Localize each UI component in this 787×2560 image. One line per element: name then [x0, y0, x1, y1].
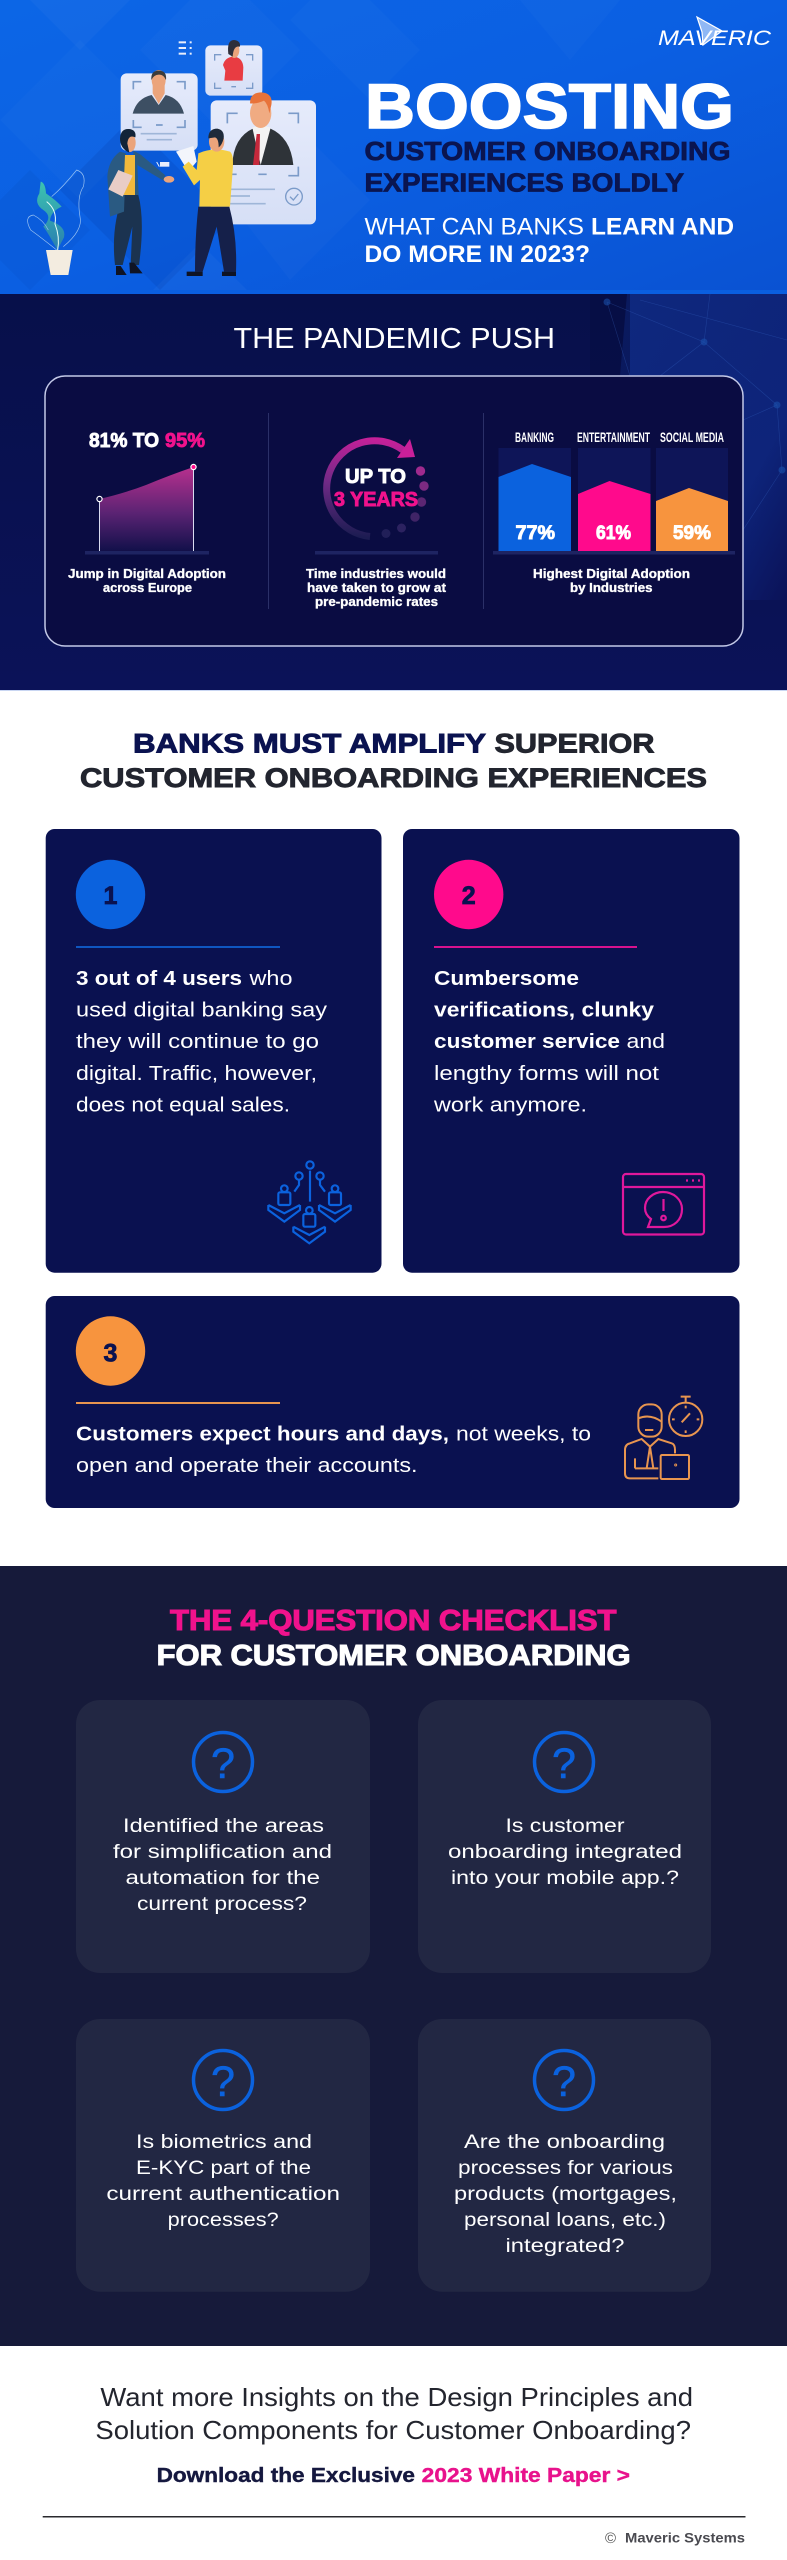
- card 3: customer expectations: [46, 1296, 739, 1508]
- prompt text: Want more Insights on the Design Principles and: [100, 2382, 693, 2412]
- icon: question mark: ?: [552, 2058, 576, 2106]
- number badge 2: [434, 860, 503, 929]
- question text: [106, 2132, 340, 2231]
- icon: question mark: ?: [211, 1740, 235, 1788]
- caption: have taken to grow at: [307, 580, 447, 595]
- figure: man with clipboard: [176, 129, 236, 276]
- question text: automation for the: [126, 1868, 320, 1889]
- icon: plant in pot: [28, 170, 84, 275]
- question text: [454, 2132, 677, 2257]
- question text: personal loans, etc.): [464, 2210, 666, 2231]
- icon: question mark: [534, 1732, 594, 1792]
- card 1: digital banking users: [46, 829, 381, 1273]
- value: up to 3 years: 3 YEARS: [334, 489, 418, 511]
- section: banks must amplify: [0, 690, 787, 1566]
- card 2 text: verifications, clunky: [434, 1000, 655, 1022]
- number badge 1: [76, 860, 145, 929]
- value: 81% to 95%: 95%: [165, 430, 205, 452]
- illustration: onboarding team and ID cards: [28, 40, 316, 276]
- caption: Time industries would: [306, 566, 446, 581]
- card 1 text: does not equal sales.: [76, 1095, 290, 1117]
- bar: entertainment: 61%: [596, 523, 631, 544]
- bar: banking: [498, 429, 571, 551]
- heading: banks must amplify superior customer onboarding experiences: BANKS MUST AMPLIFY: [133, 728, 486, 758]
- value: up to 3 years: UP TO: [345, 466, 406, 488]
- prompt text: Solution Components for Customer Onboarding?: [95, 2415, 691, 2445]
- card 1 text: who: [248, 968, 292, 990]
- question text: products (mortgages,: [454, 2184, 677, 2205]
- stat: up to 3 years: [306, 439, 447, 609]
- question card 3: [76, 2019, 370, 2292]
- icon: question mark: ?: [211, 2058, 235, 2106]
- question card 2: [418, 1700, 711, 1973]
- heading: the 4-question checklist for customer onboarding: THE 4-QUESTION CHECKLIST: [170, 1605, 617, 1637]
- caption: by Industries: [570, 580, 652, 595]
- card 1 text: digital. Traffic, however,: [76, 1063, 317, 1085]
- figure: woman with folder: [107, 129, 174, 275]
- prompt text: [95, 2382, 693, 2445]
- section: the pandemic push: [0, 290, 787, 690]
- question text: [113, 1816, 332, 1915]
- card 1 text: used digital banking say: [76, 1000, 327, 1022]
- card 2 text: and: [626, 1031, 665, 1053]
- question text: current process?: [137, 1894, 307, 1915]
- heading: the pandemic push: THE PANDEMIC PUSH: [234, 323, 555, 355]
- tagline: what can banks learn and do more in 2023: LEARN AND: [591, 214, 734, 240]
- card 2 text: work anymore.: [433, 1095, 587, 1117]
- card 3 text: not weeks, to: [456, 1424, 591, 1446]
- title: Boosting: BOOSTING: [365, 72, 734, 142]
- heading: banks must amplify superior customer onboarding experiences: CUSTOMER ONBOARDING EXPERIENCES: [80, 763, 707, 793]
- download link: Download the Exclusive: [157, 2465, 415, 2487]
- subtitle: customer onboarding experiences boldly: EXPERIENCES BOLDLY: [364, 168, 684, 198]
- card 3 text: open and operate their accounts.: [76, 1455, 418, 1477]
- bar: entertainment: [577, 429, 650, 551]
- card 3 text: [76, 1424, 591, 1477]
- question text: [448, 1816, 682, 1889]
- icon: browser alert: [623, 1174, 704, 1234]
- question text: Is customer: [506, 1816, 625, 1837]
- question text: E-KYC part of the: [136, 2158, 311, 2179]
- heading: the 4-question checklist for customer onboarding: FOR CUSTOMER ONBOARDING: [157, 1640, 631, 1672]
- question text: processes for various: [458, 2158, 673, 2179]
- tagline: what can banks learn and do more in 2023: WHAT CAN BANKS: [364, 214, 584, 240]
- caption: [306, 566, 447, 609]
- number badge 1: 1: [104, 882, 118, 910]
- question text: onboarding integrated: [448, 1842, 682, 1863]
- profile card: man: [121, 70, 198, 151]
- icon: question mark: [194, 2050, 252, 2110]
- value: up to 3 years: [334, 466, 418, 511]
- profile card: man in suit: [211, 92, 316, 224]
- bar: social media: [656, 429, 728, 551]
- stat: jump in digital adoption: [68, 430, 226, 595]
- bar: entertainment: ENTERTAINMENT: [577, 429, 650, 445]
- question text: current authentication: [106, 2184, 340, 2205]
- footer: call to action: [0, 2346, 787, 2560]
- card 2: cumbersome verifications: [403, 829, 740, 1273]
- section: 4-question checklist: [0, 1566, 787, 2346]
- question text: integrated?: [506, 2236, 624, 2257]
- number badge 2: 2: [462, 882, 476, 910]
- caption: pre-pandemic rates: [315, 594, 438, 609]
- question text: for simplification and: [113, 1842, 332, 1863]
- caption: Highest Digital Adoption: [533, 566, 690, 581]
- icon: ID chip: [157, 162, 169, 167]
- panel: pandemic statistics: [45, 376, 743, 646]
- question text: Identified the areas: [123, 1816, 324, 1837]
- value: 81% to 95%: [89, 430, 205, 452]
- copyright: ©: [605, 2530, 616, 2547]
- heading: banks must amplify superior customer onboarding experiences: SUPERIOR: [494, 728, 654, 758]
- question card 4: [418, 2019, 711, 2292]
- number badge 3: [76, 1316, 145, 1386]
- tagline: what can banks learn and do more in 2023: DO MORE IN 2023?: [364, 241, 590, 268]
- question text: Are the onboarding: [464, 2132, 665, 2153]
- value: 81% to 95%: 81% TO: [89, 430, 159, 452]
- icon: agent with stopwatch: [625, 1397, 702, 1479]
- caption: Jump in Digital Adoption: [68, 566, 226, 581]
- bar chart: adoption by industry: [493, 429, 735, 554]
- bar: social media: SOCIAL MEDIA: [660, 429, 724, 445]
- heading: banks must amplify superior customer onboarding experiences: [80, 728, 707, 793]
- hero banner: [0, 0, 787, 293]
- chart: adoption area curve: [85, 464, 209, 554]
- icon: question mark: ?: [552, 1740, 576, 1788]
- card 1 text: 3 out of 4 users: [76, 968, 242, 990]
- logo: Maveric: MAVERIC: [658, 27, 772, 50]
- caption: [533, 566, 690, 595]
- subtitle: customer onboarding experiences boldly: CUSTOMER ONBOARDING: [364, 136, 730, 166]
- icon: list glyph: [179, 41, 192, 55]
- stat: highest digital adoption by industries: [493, 429, 735, 595]
- icon: question mark: [534, 2050, 594, 2110]
- logo: Maveric: [658, 17, 772, 50]
- bar: banking: BANKING: [515, 429, 554, 445]
- subtitle: customer onboarding experiences boldly: [364, 136, 730, 198]
- heading: the 4-question checklist for customer onboarding: [157, 1605, 631, 1672]
- card 2 text: [433, 968, 665, 1117]
- caption: across Europe: [103, 580, 192, 595]
- caption: [68, 566, 226, 595]
- card 1 text: [76, 968, 327, 1117]
- number badge 3: 3: [104, 1340, 117, 1368]
- icon: question mark: [194, 1732, 252, 1792]
- download link: [157, 2465, 630, 2487]
- icon: users network: [268, 1161, 351, 1243]
- icon: circular arrow: [315, 439, 438, 554]
- question text: processes?: [168, 2210, 279, 2231]
- tagline: what can banks learn and do more in 2023: [364, 214, 734, 268]
- question text: Is biometrics and: [136, 2132, 312, 2153]
- card 2 text: lengthy forms will not: [434, 1063, 660, 1085]
- card 3 text: Customers expect hours and days,: [76, 1424, 449, 1446]
- profile card: woman: [205, 40, 262, 96]
- copyright: Maveric Systems: [625, 2530, 745, 2546]
- card 2 text: customer service: [434, 1031, 620, 1053]
- card 2 text: Cumbersome: [434, 968, 579, 990]
- download link: 2023 White Paper >: [422, 2465, 630, 2487]
- question card 1: [76, 1700, 370, 1973]
- bar: social media: 59%: [673, 523, 711, 544]
- question text: into your mobile app.?: [451, 1868, 679, 1889]
- card 1 text: they will continue to go: [76, 1031, 319, 1053]
- bar: banking: 77%: [516, 523, 555, 544]
